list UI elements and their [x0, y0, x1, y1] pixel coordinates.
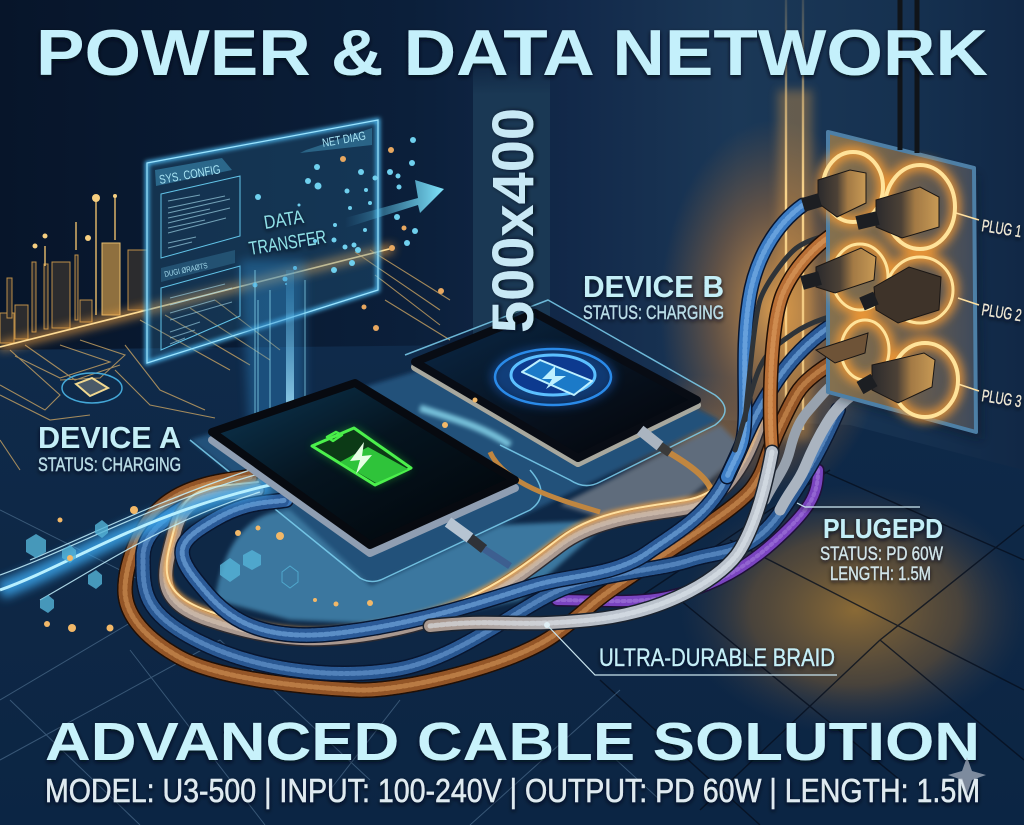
icon: blue charging battery	[491, 347, 615, 407]
cable: brown upper	[770, 223, 857, 452]
cable: tan	[166, 412, 761, 639]
data particles	[252, 137, 444, 331]
braid callout: ULTRA-DURABLE BRAID	[599, 644, 835, 672]
cable: dark leads	[735, 230, 868, 450]
city skyline	[0, 194, 147, 343]
vertical strip behind size label	[473, 60, 550, 350]
cable: blue upper	[727, 205, 803, 477]
gold vertical lights	[778, 0, 812, 440]
cable: silver main	[430, 452, 772, 626]
plug leaders and labels	[956, 213, 1023, 411]
data transfer text: DATA	[262, 207, 306, 234]
device b cable	[490, 430, 712, 512]
device b label: STATUS: CHARGING	[583, 303, 724, 324]
plugepd callout: PLUGEPD	[823, 513, 943, 544]
device a connector	[448, 522, 510, 566]
size label: 500x400	[481, 108, 546, 333]
config listing box	[161, 176, 240, 258]
wall socket plate	[802, 0, 982, 440]
panel tab: net diag: NET DIAG	[321, 129, 367, 150]
plugepd callout: LENGTH: 1.5M	[830, 564, 931, 585]
device b label	[583, 269, 724, 324]
status box: DUGI ØRAØTS	[164, 261, 208, 279]
plugs	[816, 170, 941, 403]
data transfer text	[247, 207, 328, 260]
hologram panel	[147, 120, 378, 363]
strain reliefs	[802, 200, 878, 388]
title: POWER & DATA NETWORK	[36, 16, 988, 89]
cable: brown	[125, 353, 850, 690]
device b phone	[415, 313, 697, 463]
lit platform floor	[190, 340, 745, 625]
device a label: STATUS: CHARGING	[38, 455, 181, 476]
icon: green charging battery	[312, 428, 411, 485]
status box	[161, 250, 240, 350]
gold horizon line	[0, 248, 393, 347]
device b label: DEVICE B	[583, 269, 724, 304]
hexagons and sparks	[26, 398, 478, 632]
data arrow	[345, 180, 444, 228]
circuit traces	[0, 250, 450, 470]
cable: blue outer	[143, 410, 838, 673]
sparkle watermark	[948, 757, 986, 794]
cable: silver upper pair	[765, 380, 861, 510]
platform outlines	[190, 300, 725, 582]
chip	[62, 373, 122, 403]
device a label: DEVICE A	[38, 420, 181, 455]
cable: blue inner	[182, 310, 865, 635]
device a phone	[212, 383, 515, 553]
data beams	[240, 260, 305, 435]
plugepd callout: STATUS: PD 60W	[820, 544, 943, 565]
power leads	[900, 0, 917, 153]
plugepd callout	[797, 503, 943, 585]
cables	[125, 205, 868, 690]
braid callout	[544, 622, 837, 675]
data transfer text: TRANSFER	[247, 227, 328, 260]
light streaks	[0, 408, 510, 600]
device a label	[38, 420, 181, 476]
footer title: ADVANCED CABLE SOLUTION	[45, 712, 980, 772]
panel tab: sys config: SYS. CONFIG	[158, 162, 222, 187]
cable: purple	[557, 470, 818, 601]
